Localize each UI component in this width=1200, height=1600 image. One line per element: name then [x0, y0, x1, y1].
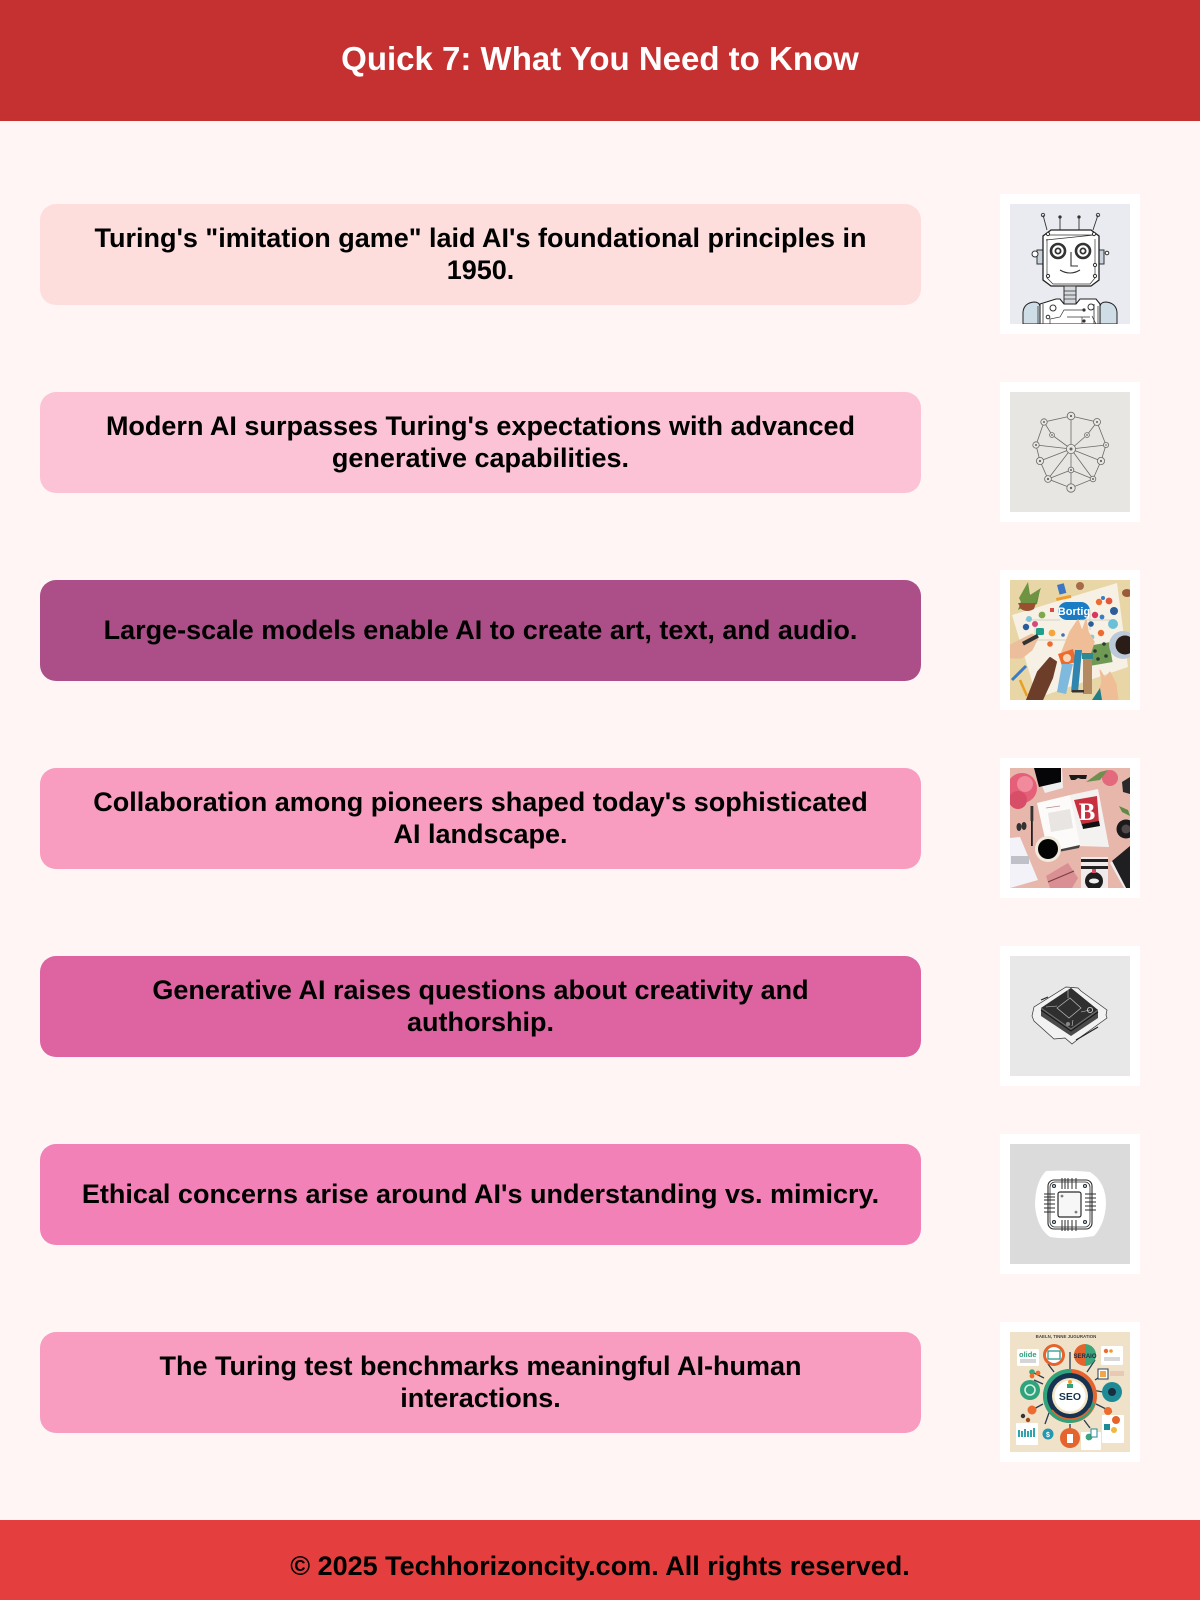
panel: point 4	[40, 768, 921, 868]
panel: point 3	[40, 580, 921, 680]
image: robot line drawing	[1000, 194, 1140, 334]
image: flat-lay desk with magazine: B	[1079, 799, 1095, 826]
panel: point 4: Collaboration among pioneers shaped today's sophisticated	[93, 787, 868, 817]
image: hands collaborating over a diagram	[1000, 570, 1140, 710]
panel: point 1: Turing's "imitation game" laid AI's foundational principles in	[94, 223, 866, 253]
panel: point 3: Large-scale models enable AI to create art, text, and audio.	[104, 615, 857, 645]
panel: point 1	[40, 204, 921, 304]
panel: point 1: 1950.	[447, 255, 514, 285]
image: flat-lay desk with magazine	[1000, 758, 1140, 898]
panel: point 5: Generative AI raises questions about creativity and	[152, 975, 809, 1005]
panel: point 4: AI landscape.	[393, 819, 568, 849]
panel: point 5	[40, 956, 921, 1056]
image: SEO infographic: $	[1046, 1432, 1050, 1439]
header banner	[0, 0, 1200, 121]
panel: point 2	[40, 392, 921, 492]
panel: point 6	[40, 1144, 921, 1244]
image: SEO infographic: SEO	[1059, 1391, 1081, 1403]
panel: point 7: interactions.	[400, 1383, 561, 1413]
panel: point 2: generative capabilities.	[332, 443, 629, 473]
image: network diagram	[1000, 382, 1140, 522]
footer copyright text: © 2025 Techhorizoncity.com. All rights reserved.	[290, 1551, 910, 1581]
panel: point 6: Ethical concerns arise around AI's understanding vs. mimicry.	[82, 1179, 879, 1209]
footer banner	[0, 1520, 1200, 1600]
image: hands collaborating over a diagram: Bortig	[1058, 606, 1090, 618]
image: SEO infographic: BAELN, TINNE JUGURATION	[1036, 1334, 1096, 1339]
image: SEO infographic: olide	[1019, 1350, 1037, 1359]
image: SEO infographic	[1000, 1322, 1140, 1462]
panel: point 7: The Turing test benchmarks meaningful AI-human	[159, 1351, 802, 1381]
image: SEO infographic: SERAIO	[1073, 1354, 1097, 1360]
panel: point 5: authorship.	[407, 1007, 554, 1037]
image: chip on white blob	[1000, 1134, 1140, 1274]
panel: point 7	[40, 1332, 921, 1432]
panel: point 2: Modern AI surpasses Turing's expectations with advanced	[106, 411, 855, 441]
image: isometric black chip	[1000, 946, 1140, 1086]
title: Quick 7: What You Need to Know	[341, 40, 859, 77]
